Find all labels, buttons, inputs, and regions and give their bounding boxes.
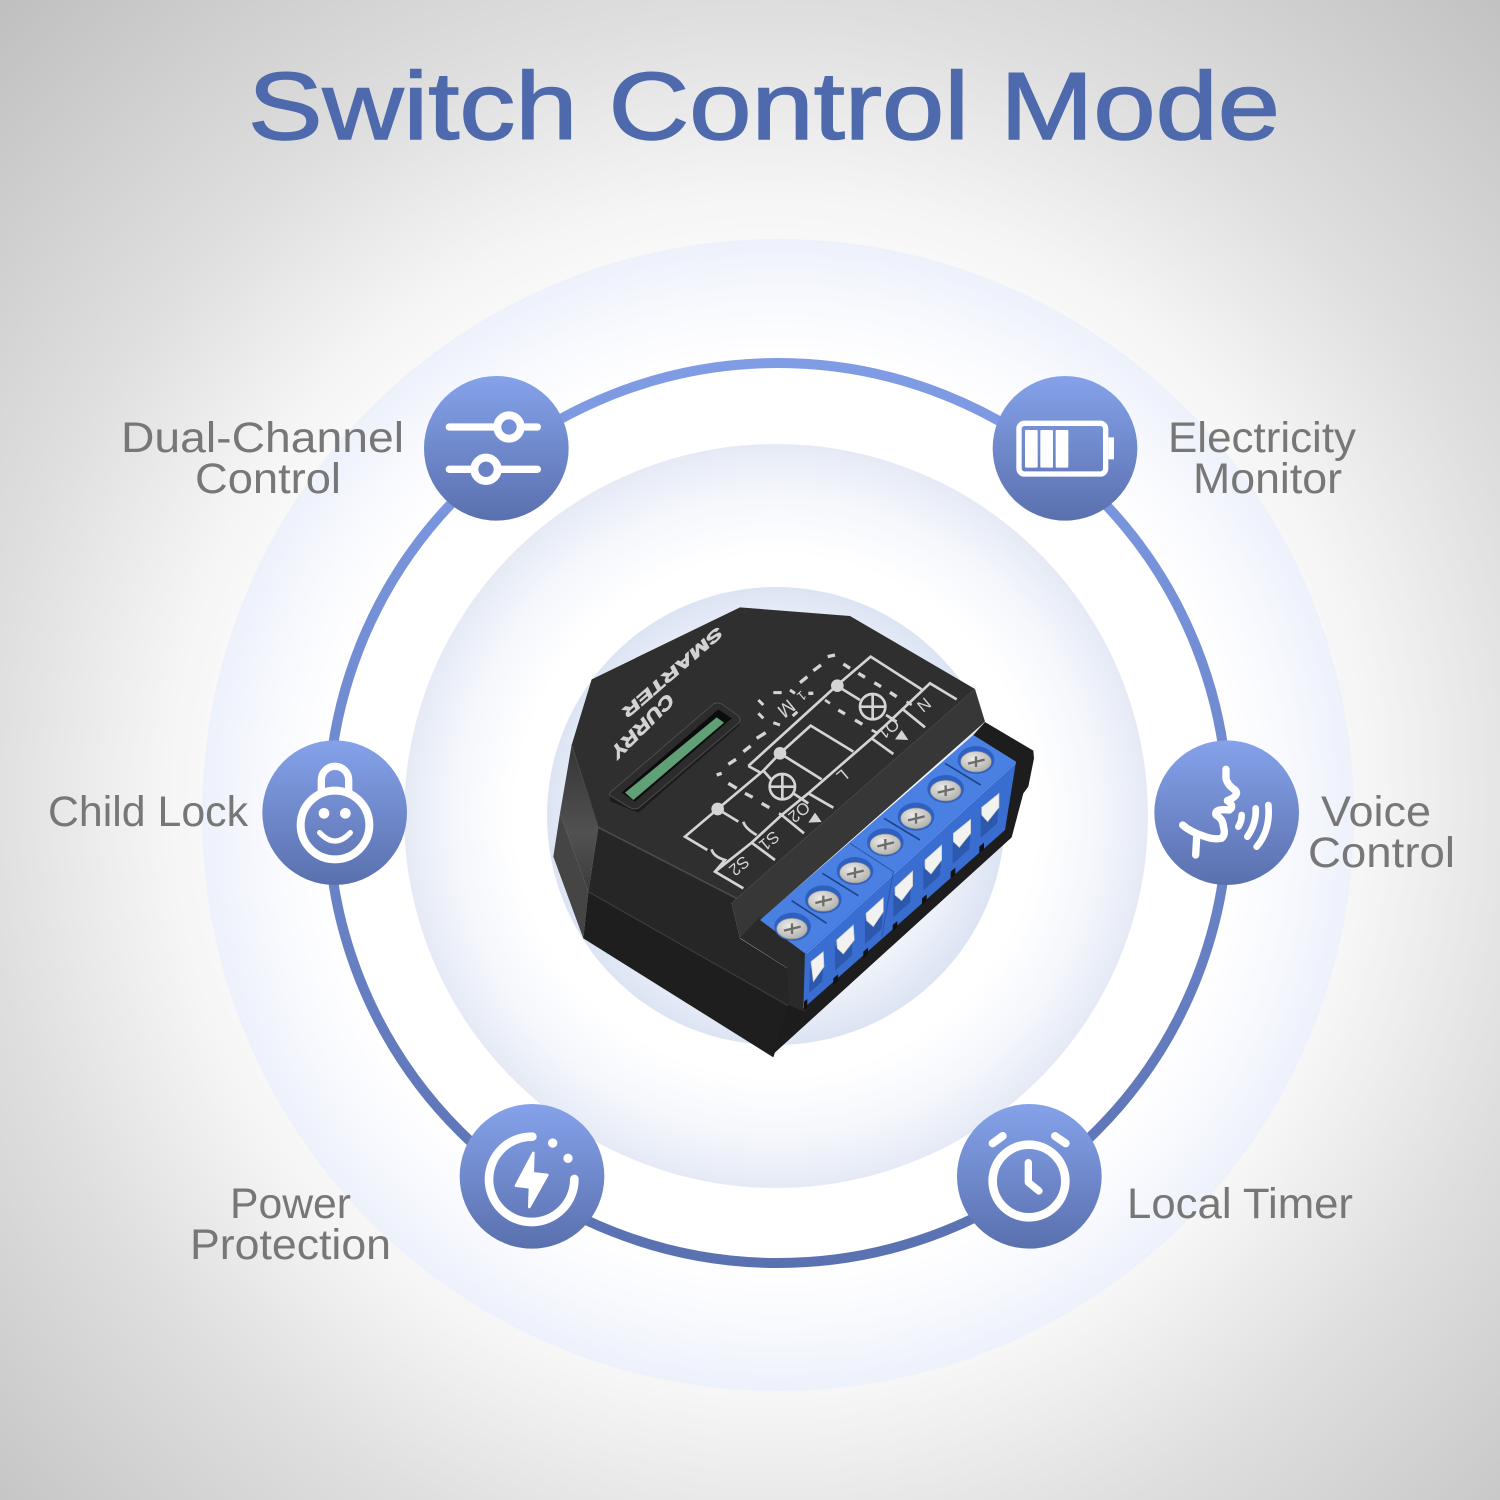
label: voice control: Voice — [1321, 788, 1431, 836]
module body — [553, 607, 985, 1057]
inner disc behind product — [547, 587, 1005, 1045]
wiring nodes and arrows — [711, 679, 908, 823]
feature: power protection — [190, 1104, 604, 1269]
feature: child lock — [48, 740, 407, 885]
label: dual-channel control: Dual-Channel — [121, 414, 404, 462]
label: dual-channel control — [121, 414, 404, 503]
label: local timer: Local Timer — [1127, 1180, 1353, 1228]
brand logo — [608, 622, 724, 764]
feature: voice control — [1154, 740, 1455, 885]
label: voice control: Control — [1308, 829, 1455, 877]
label: power protection — [190, 1180, 391, 1269]
icon: battery — [993, 376, 1137, 521]
product: smart switch module — [553, 607, 1034, 1057]
terminal labels: 1 — [794, 688, 809, 704]
feature: electricity monitor — [993, 376, 1357, 521]
terminal labels: N — [913, 694, 935, 716]
terminal labels — [725, 688, 935, 880]
label: dual-channel control: Control — [195, 455, 341, 503]
label: child lock: Child Lock — [48, 788, 248, 836]
connecting ring — [328, 363, 1228, 1263]
icon: alarm clock — [957, 1104, 1102, 1249]
terminal labels: O2 — [784, 798, 814, 826]
icon: sliders — [424, 376, 569, 521]
brand logo: SMARTER — [620, 622, 724, 721]
icon: speaking face — [1154, 740, 1299, 885]
terminal block — [740, 722, 1034, 1054]
label: electricity monitor — [1168, 414, 1357, 503]
terminal labels: L — [833, 765, 852, 786]
feature: local timer — [957, 1104, 1353, 1249]
middle halo circle — [404, 444, 1148, 1188]
terminal labels: S1 — [755, 827, 783, 855]
feature: dual-channel control — [121, 376, 569, 521]
terminal labels: O1 — [874, 714, 903, 743]
brand logo: CURRY — [608, 689, 677, 764]
LED indicator slot — [609, 703, 740, 813]
label: electricity monitor: Monitor — [1193, 455, 1342, 503]
title: Switch Control Mode — [248, 53, 1280, 160]
terminal labels: S2 — [725, 852, 753, 880]
label: power protection: Power — [230, 1180, 351, 1228]
icon: lightning in circle — [460, 1104, 604, 1249]
wiring diagram — [685, 655, 957, 888]
label: electricity monitor: Electricity — [1168, 414, 1357, 462]
outer halo circle — [202, 239, 1354, 1391]
label: power protection: Protection — [190, 1221, 391, 1269]
terminal labels: M — [773, 695, 799, 721]
label: voice control — [1308, 788, 1455, 877]
icon: smiling padlock — [262, 740, 407, 885]
